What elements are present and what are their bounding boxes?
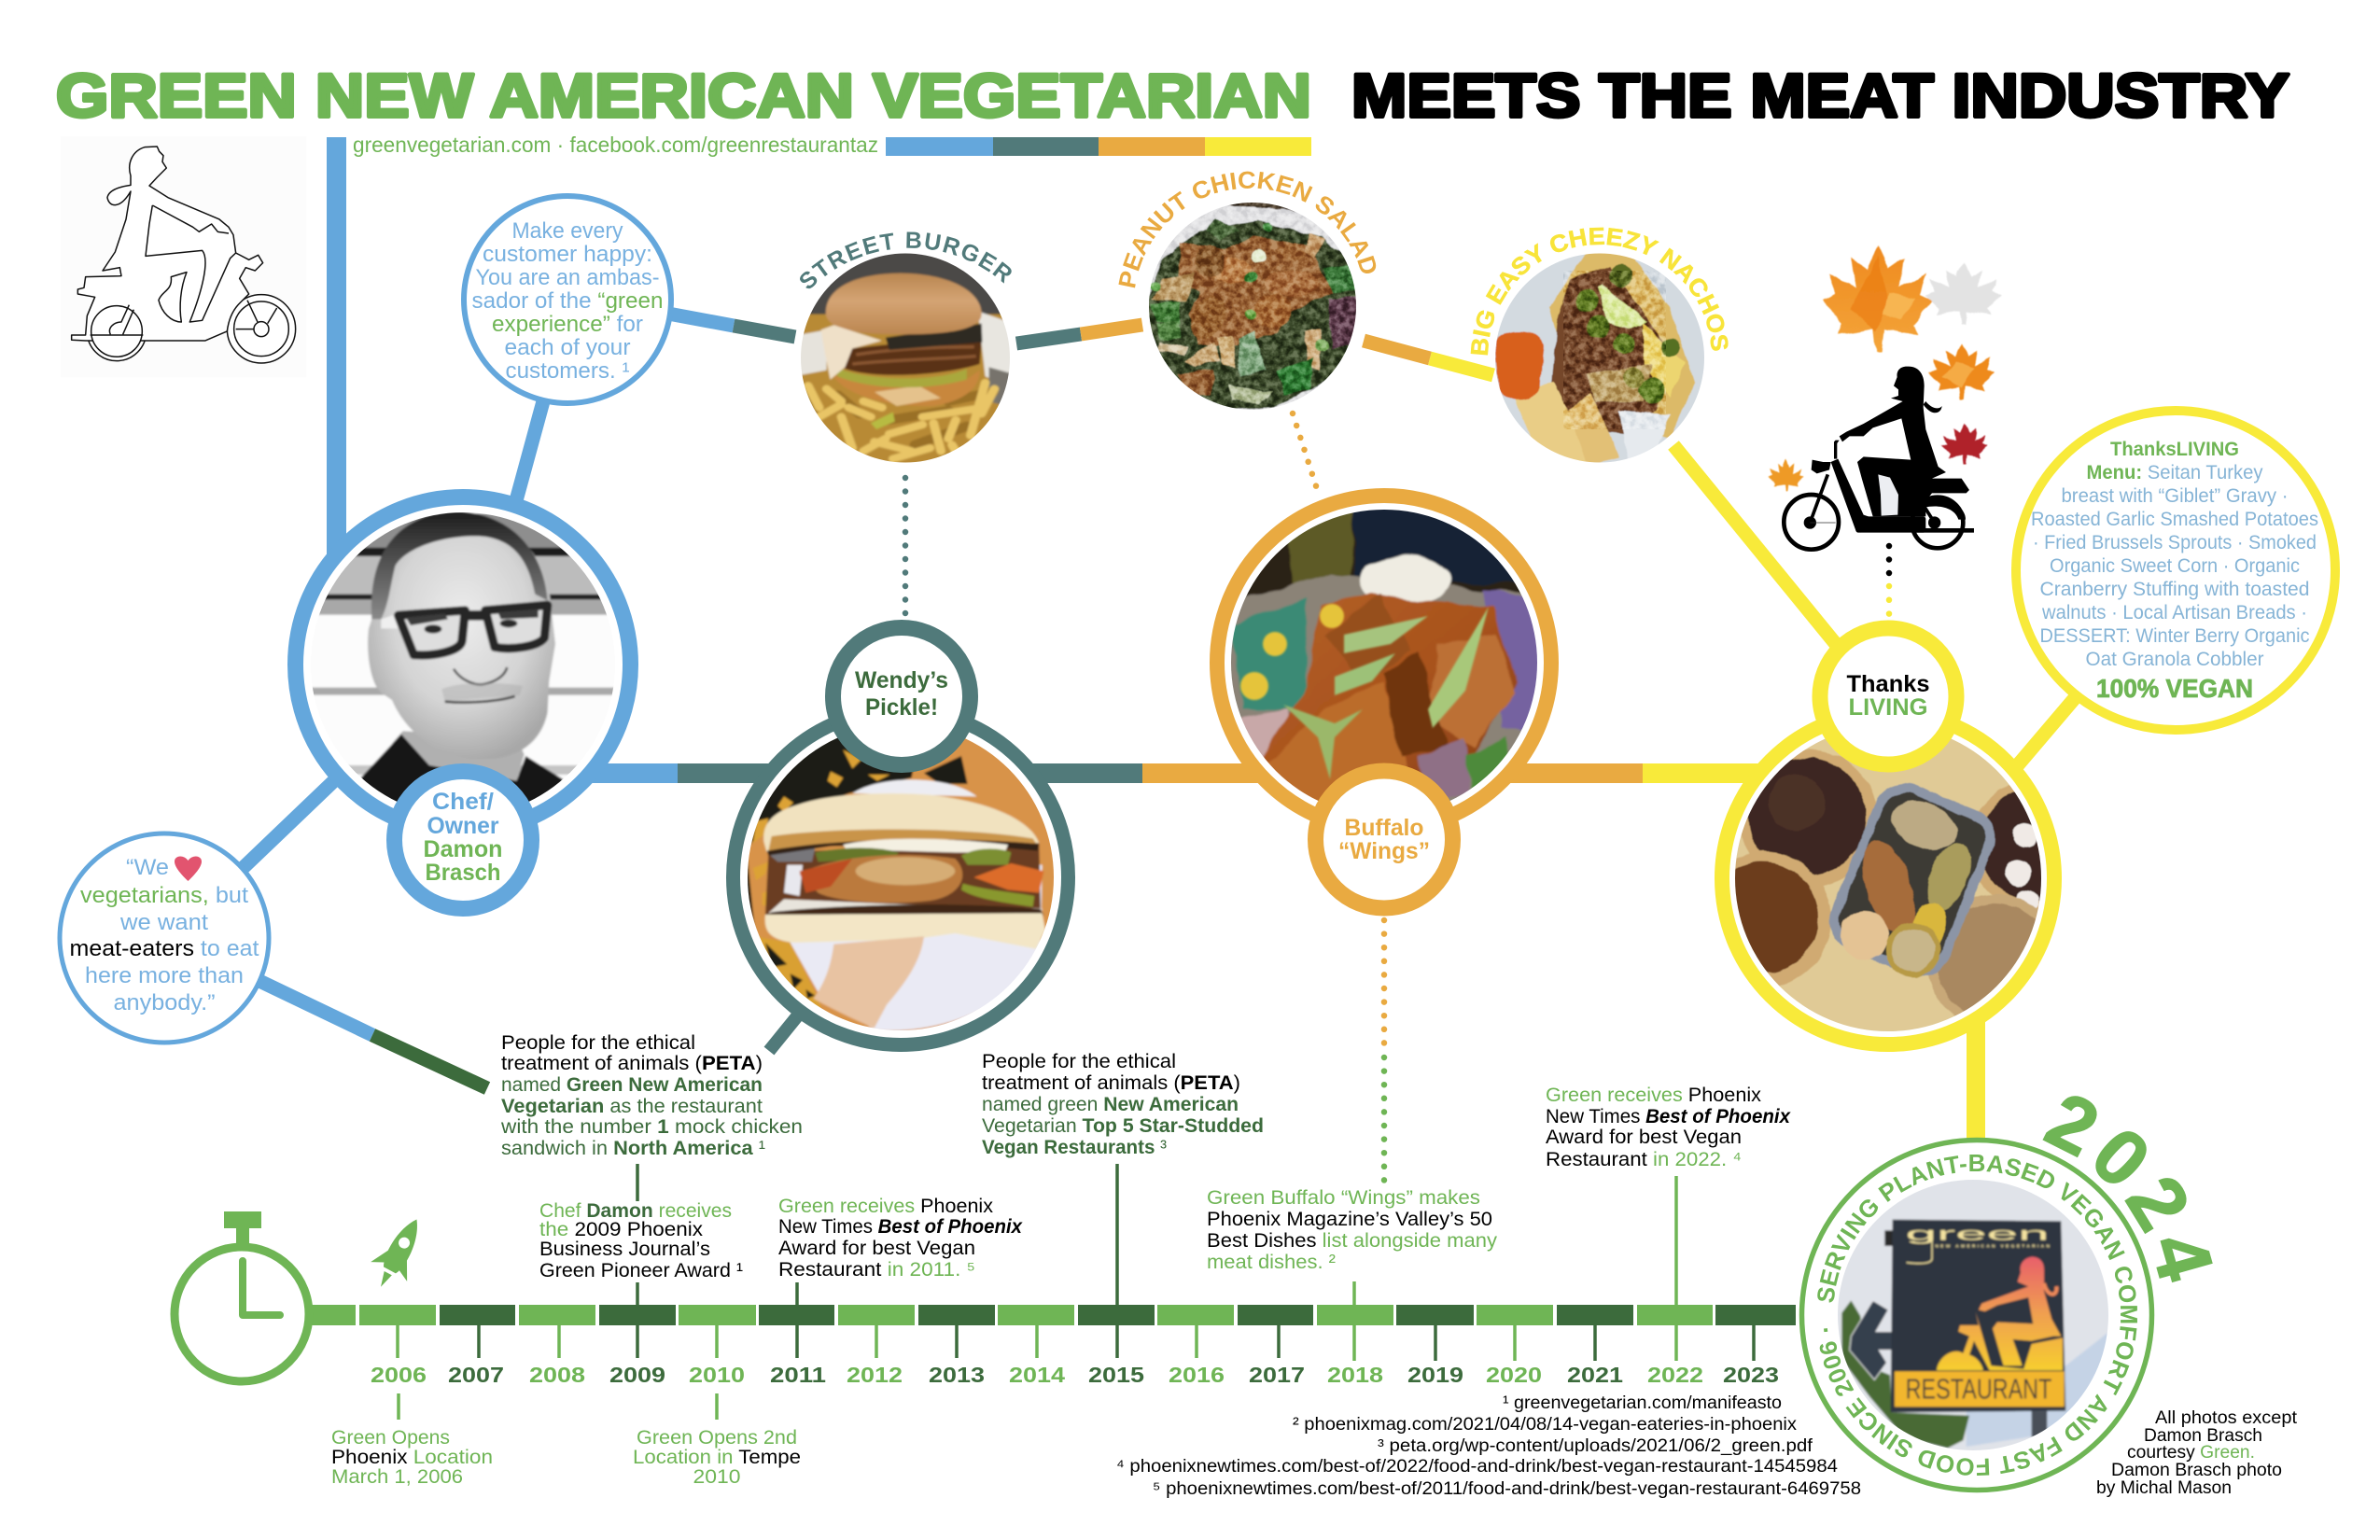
panel: customer happy speech bubble: each of your [504, 335, 631, 360]
timeline: year labels [371, 1363, 1779, 1387]
photo: pickle sandwich [737, 719, 1064, 1045]
text: chef damon pioneer award [539, 1200, 743, 1281]
title: GREEN NEW AMERICAN VEGETARIAN [56, 61, 1311, 130]
timeline: year labels: 2015 [1088, 1363, 1144, 1387]
menu text: Organic Sweet Corn · Organic [2050, 555, 2300, 577]
timeline: year labels: 2022 [1647, 1363, 1703, 1387]
label: peanut chicken salad arc: PEANUT CHICKEN SALAD [1118, 172, 1376, 287]
panel: vegetarians speech bubble: we want [119, 910, 208, 935]
connector: vertical blue line [327, 137, 346, 557]
menu text: DESSERT: Winter Berry Organic [2040, 625, 2309, 647]
footnotes: ⁴ phoenixnewtimes.com/best-of/2022/food-and-drink/best-vegan-restaurant-14545984 [1116, 1457, 1838, 1477]
label: wendy's pickle: Wendy’s [855, 667, 948, 693]
dotted connectors [905, 413, 1889, 1183]
label: big easy cheezy nachos arc: BIG EASY CHEEZY NACHOS [1471, 228, 1729, 355]
footnotes: ⁵ phoenixnewtimes.com/best-of/2011/food-and-drink/best-vegan-restaurant-6469758 [1153, 1479, 1861, 1499]
text: PETA top 5: Vegetarian Top 5 Star-Studded [982, 1115, 1264, 1137]
text: best of phoenix 2022: Restaurant in 2022. ⁴ [1546, 1149, 1742, 1170]
menu text: breast with “Giblet” Gravy · [2061, 485, 2289, 507]
footnotes: ² phoenixmag.com/2021/04/08/14-vegan-eateries-in-phoenix [1293, 1415, 1798, 1435]
text: chef damon pioneer award: the 2009 Phoenix [539, 1219, 704, 1240]
text: PETA top 5 [982, 1051, 1264, 1158]
timeline: year bar [311, 1305, 1796, 1325]
timeline: year labels: 2010 [689, 1363, 745, 1387]
text: PETA number 1 mock chicken: Vegetarian as the restaurant [501, 1096, 763, 1117]
text: buffalo wings best dishes: Best Dishes list alongside many [1207, 1230, 1498, 1252]
panel: vegetarians speech bubble: anybody.” [114, 990, 215, 1015]
main horizontal timeline connector [579, 763, 1764, 783]
timeline: year labels: 2009 [609, 1363, 665, 1387]
label: chef and owner: Owner [427, 813, 499, 839]
text: PETA top 5: named green New American [982, 1094, 1239, 1115]
panel: thanksliving meal [1697, 712, 2100, 1044]
text: PETA number 1 mock chicken [500, 1032, 803, 1159]
text: PETA top 5: People for the ethical [982, 1051, 1176, 1072]
panel: customer happy speech bubble: You are an ambas- [476, 265, 659, 290]
text: PETA number 1 mock chicken: with the number 1 mock chicken [500, 1116, 803, 1138]
label: buffalo wings: “Wings” [1338, 838, 1430, 864]
menu text [2031, 439, 2318, 703]
connector: teal stub under sandwich [769, 1016, 797, 1051]
panel: buffalo wings [1217, 496, 1554, 830]
menu text: Oat Granola Cobbler [2085, 649, 2264, 670]
panel: vegetarians speech bubble: vegetarians, but [80, 883, 248, 908]
website links: greenvegetarian.com · facebook.com/greenrestaurantaz [353, 133, 878, 157]
photo credits [2096, 1408, 2298, 1498]
footnotes: ³ peta.org/wp-content/uploads/2021/06/2_green.pdf [1378, 1436, 1813, 1456]
photo credits: All photos except [2155, 1408, 2298, 1428]
text: buffalo wings best dishes [1207, 1187, 1498, 1273]
text: green opens phoenix: Phoenix Location [331, 1447, 493, 1468]
timeline: year labels: 2017 [1249, 1363, 1305, 1387]
colour key bar [886, 137, 1311, 156]
menu text: Cranberry Stuffing with toasted [2040, 579, 2309, 600]
title [56, 61, 2289, 130]
photo credits: courtesy Green. [2127, 1443, 2255, 1463]
text: best of phoenix 2011: New Times Best of Phoenix [778, 1216, 1023, 1238]
timeline: year labels: 2012 [847, 1363, 903, 1387]
text: green opens tempe: Green Opens 2nd [637, 1427, 797, 1449]
panel: customer happy speech bubble: Make every [511, 218, 623, 244]
text: buffalo wings best dishes: Phoenix Magazine’s Valley’s 50 [1207, 1209, 1492, 1230]
text: best of phoenix 2022: New Times Best of Phoenix [1546, 1106, 1791, 1127]
icon: outlined scooter rider [61, 136, 306, 377]
icon: stopwatch [175, 1211, 309, 1381]
timeline: year labels: 2016 [1169, 1363, 1225, 1387]
text: PETA top 5: Vegan Restaurants ³ [982, 1137, 1167, 1158]
panel: chef portrait [295, 495, 631, 833]
label: thanks living [1820, 628, 1956, 764]
icon: rocket [363, 1210, 435, 1296]
label: chef and owner: Brasch [426, 860, 500, 886]
text: best of phoenix 2022: Green receives Phoenix [1546, 1085, 1762, 1106]
label: chef and owner: Chef/ [432, 789, 494, 815]
text: chef damon pioneer award: Business Journal’s [539, 1239, 710, 1260]
timeline: year labels: 2014 [1009, 1363, 1065, 1387]
timeline: year ticks [398, 1325, 1754, 1361]
panel: customer happy speech bubble: customer happy: [483, 242, 652, 267]
timeline: year labels: 2011 [770, 1363, 826, 1387]
text: buffalo wings best dishes: meat dishes. ² [1207, 1252, 1336, 1273]
panel: vegetarians speech bubble: meat-eaters to eat [69, 936, 259, 961]
photo credits: Damon Brasch photo [2111, 1461, 2282, 1480]
connectors: chef to speech bubbles [238, 401, 543, 1088]
text: green opens phoenix: Green Opens [331, 1427, 450, 1449]
footnotes [1116, 1393, 1861, 1499]
text: PETA number 1 mock chicken: treatment of animals ( PETA) [501, 1053, 763, 1074]
photo: big easy cheezy nachos [1495, 254, 1704, 463]
panel: customer happy speech bubble [464, 196, 671, 403]
text: best of phoenix 2011: Green receives Phoenix [778, 1196, 994, 1217]
photo: green restaurant sign: green [1906, 1225, 2050, 1244]
label: buffalo wings [1316, 771, 1452, 908]
photo: green restaurant sign: RESTAURANT [1906, 1373, 2052, 1405]
title: MEETS THE MEAT INDUSTRY [1351, 61, 2289, 130]
label: wendy's pickle: Pickle! [865, 694, 938, 721]
label: 2024: 2024 [2034, 1075, 2231, 1290]
photo: Damon Brasch [312, 512, 614, 802]
connectors: service bubble to burger to salad to nachos [668, 314, 1843, 653]
panel: vegetarians speech bubble: here more than [85, 963, 244, 988]
panel: wendy's pickle sandwich [734, 709, 1068, 1045]
photo: pies and meal tray [1697, 719, 2100, 1036]
menu text: 100% VEGAN [2096, 674, 2253, 703]
text: PETA number 1 mock chicken: sandwich in North America ¹ [501, 1138, 765, 1159]
text: PETA top 5: treatment of animals ( PETA) [982, 1072, 1240, 1094]
panel: 2024 badge [1801, 1141, 2152, 1490]
menu text: Roasted Garlic Smashed Potatoes [2031, 509, 2318, 530]
icon: black scooter silhouette [1784, 367, 1974, 550]
menu text: Menu: Seitan Turkey [2087, 462, 2263, 483]
connector: thanksgiving ring to menu bubble [2016, 686, 2085, 767]
menu text: ThanksLIVING [2110, 439, 2239, 460]
badge arc text: SERVING PLANT-BASED VEGAN COMFORT AND FAST FOOD SINCE 2006 · [1811, 1149, 2143, 1481]
photo credits: Damon Brasch [2144, 1426, 2262, 1446]
text: best of phoenix 2022 [1546, 1085, 1791, 1170]
timeline: year labels: 2023 [1723, 1363, 1779, 1387]
panel: vegetarians speech bubble [60, 833, 269, 1043]
photo: buffalo wings [1218, 499, 1554, 826]
text: green opens tempe: 2010 [693, 1466, 741, 1488]
text: green opens tempe [633, 1427, 801, 1488]
icon: autumn leaves [1769, 245, 2001, 492]
panel: customer happy speech bubble: experience” for [492, 312, 643, 337]
text: PETA number 1 mock chicken: named Green New American [501, 1074, 763, 1096]
text: green opens phoenix [331, 1427, 493, 1488]
label: chef and owner [394, 771, 532, 909]
footnotes: ¹ greenvegetarian.com/manifeasto [1503, 1393, 1782, 1413]
label: buffalo wings: Buffalo [1344, 815, 1424, 841]
menu text: · Fried Brussels Sprouts · Smoked [2033, 532, 2317, 553]
connector: yellow line to 2024 badge [1967, 1022, 1985, 1141]
timeline: year labels: 2020 [1486, 1363, 1542, 1387]
text: best of phoenix 2011: Restaurant in 2011. ⁵ [778, 1259, 975, 1281]
label: chef and owner: Damon [424, 836, 502, 862]
panel: thanksliving menu bubble [2016, 411, 2335, 730]
timeline: year labels: 2013 [929, 1363, 985, 1387]
label: wendy's pickle [833, 627, 971, 765]
timeline: year labels: 2007 [448, 1363, 504, 1387]
icon: heart [175, 857, 202, 881]
timeline: year labels: 2008 [529, 1363, 585, 1387]
timeline: year labels: 2019 [1407, 1363, 1463, 1387]
photo credits: by Michal Mason [2096, 1478, 2232, 1498]
photo: green restaurant sign [1829, 1167, 2119, 1456]
timeline: year labels: 2018 [1327, 1363, 1383, 1387]
timeline: year labels: 2006 [371, 1363, 427, 1387]
text: green opens phoenix: March 1, 2006 [331, 1466, 463, 1488]
photo: peanut chicken salad [1149, 203, 1356, 410]
panel: vegetarians speech bubble: “We [126, 855, 169, 880]
text: best of phoenix 2011 [778, 1196, 1023, 1281]
photo: street burger [801, 254, 1010, 463]
label: thanks living: LIVING [1848, 694, 1928, 721]
text: PETA number 1 mock chicken: People for the ethical [501, 1032, 695, 1054]
photo: green restaurant sign: NEW AMERICAN VEGETARIAN [1935, 1244, 2050, 1250]
timeline: year labels: 2021 [1567, 1363, 1623, 1387]
text: chef damon pioneer award: Chef Damon receives [539, 1200, 732, 1222]
label: street burger arc: STREET BURGER [800, 231, 1012, 289]
label: thanks living: Thanks [1846, 671, 1930, 697]
panel: customer happy speech bubble: sador of the “green [472, 288, 663, 314]
text: green opens tempe: Location in Tempe [633, 1447, 801, 1468]
timeline: callout ticks [399, 1164, 1676, 1420]
panel: customer happy speech bubble: customers. ¹ [506, 358, 629, 384]
text: chef damon pioneer award: Green Pioneer Award ¹ [539, 1260, 743, 1281]
text: best of phoenix 2011: Award for best Vegan [778, 1238, 975, 1259]
text: best of phoenix 2022: Award for best Vegan [1546, 1127, 1742, 1148]
menu text: walnuts · Local Artisan Breads · [2041, 602, 2307, 623]
text: buffalo wings best dishes: Green Buffalo “Wings” makes [1207, 1187, 1480, 1209]
